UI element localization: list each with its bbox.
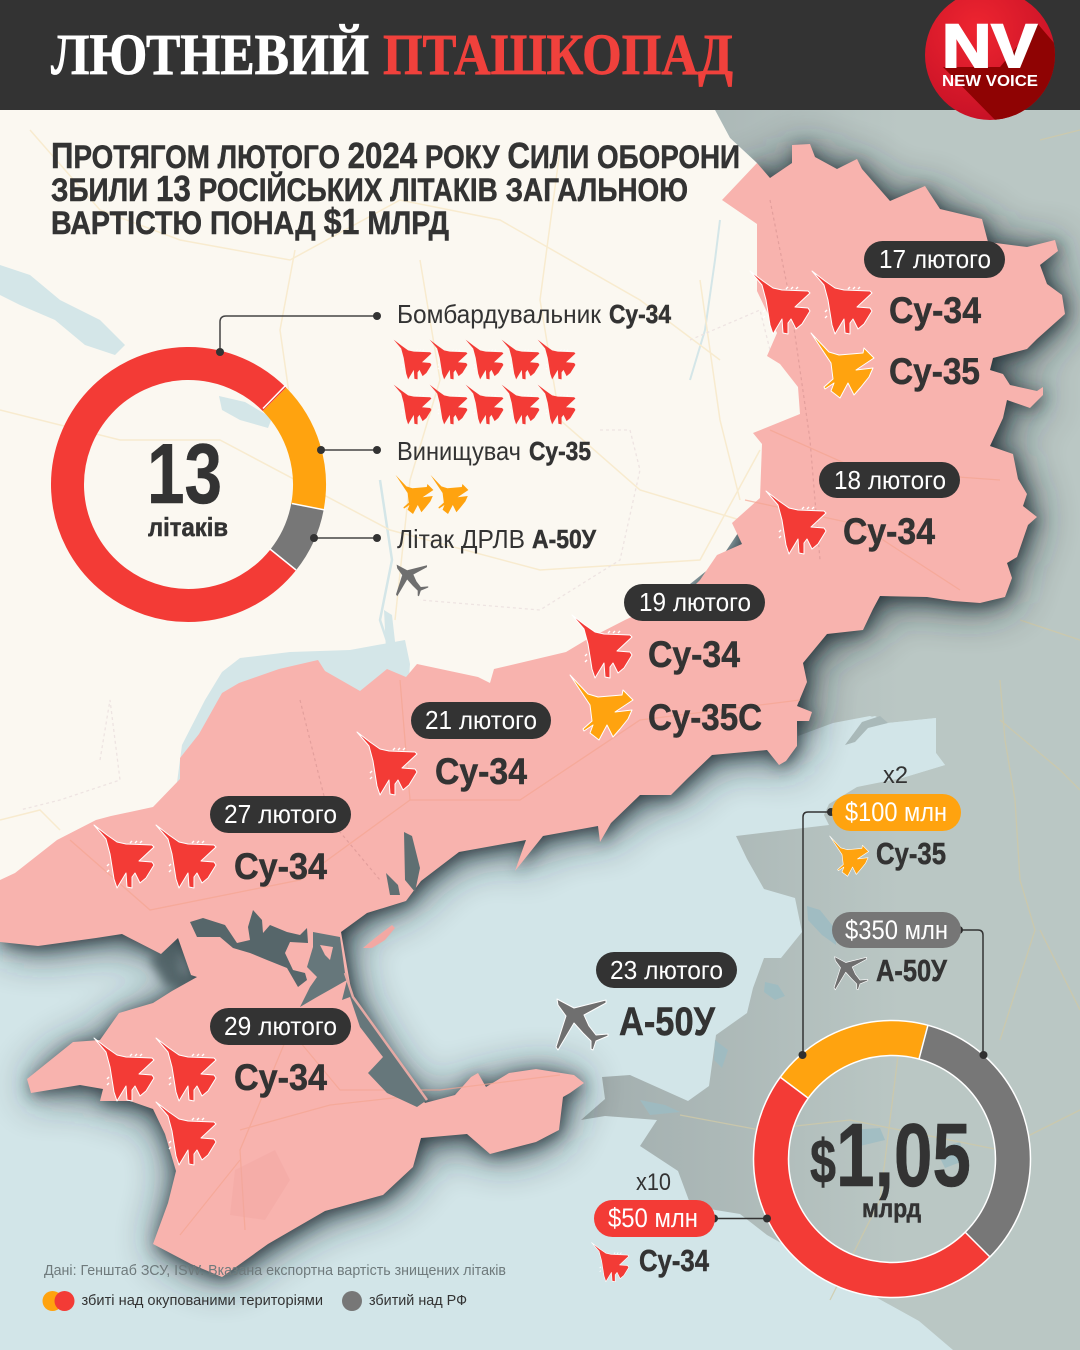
logo: NV New Voice: [925, 0, 1060, 125]
event: 21 February: Су-34: [435, 751, 527, 792]
subtitle: ПРОТЯГОМ ЛЮТОГО 2024 РОКУ СИЛИ ОБОРОНИ: [51, 135, 740, 176]
rivers and roads on Ukrainian land: [0, 130, 770, 830]
legend: Su-34 label: Бомбардувальник: [397, 299, 602, 329]
cost: Su-35: [830, 762, 961, 876]
event: 21 February: 21 лютого: [425, 705, 537, 735]
icons: ten Su-34: [394, 340, 575, 424]
event: 18 February: [766, 462, 960, 554]
event: 17 February: Су-34: [889, 290, 981, 331]
event: 27 February: Су-34: [234, 846, 327, 887]
water on Ukrainian land: [0, 265, 410, 790]
cost: Su-34: Су-34: [639, 1243, 710, 1278]
legend: A-50U label: [397, 524, 597, 554]
title: ЛЮТНЕВИЙ: [51, 22, 369, 87]
event: 27 February: 27 лютого: [224, 799, 337, 829]
donut chart: 13 aircraft by type: [67, 364, 325, 606]
icons: two Su-35: [396, 475, 468, 514]
event: 18 February: Су-34: [843, 511, 935, 552]
donut chart: total cost: 1,05: [836, 1106, 971, 1206]
legend: shot down over occupied territories: збиті над окупованими територіями: [82, 1292, 323, 1309]
cost: Su-34: [592, 1169, 715, 1282]
event: 29 February: 29 лютого: [224, 1011, 337, 1041]
event: 19 February: [570, 584, 765, 740]
legend connectors: [216, 312, 381, 542]
cost connectors: [710, 808, 988, 1222]
lakes and deltas: [640, 906, 966, 1168]
event: 19 February: Су-34: [648, 634, 740, 675]
cost: Su-34: $50 млн: [608, 1203, 698, 1233]
event: 19 February: 19 лютого: [639, 587, 751, 617]
legend: Su-35 label: Винищувач: [397, 436, 521, 466]
cost: A-50U: [832, 912, 961, 990]
cost: A-50U: А-50У: [876, 953, 948, 988]
roads in occupied territory: [70, 430, 1000, 1235]
event: 23 February: 23 лютого: [610, 955, 723, 985]
legend: shot down over Russia: [342, 1291, 467, 1311]
legend: Su-35 label: Су-35: [529, 436, 591, 466]
cost: Su-34: x10: [636, 1169, 671, 1196]
legend: shot down over Russia: збитий над РФ: [369, 1292, 467, 1309]
roads in Russia: [680, 130, 1080, 1300]
event: 27 February: [94, 796, 351, 888]
cost: Su-35: Су-35: [876, 836, 946, 871]
event: 17 February: [750, 241, 1005, 398]
legend: A-50U label: Літак ДРЛВ: [397, 524, 525, 554]
logo: NV New Voice: NEW VOICE: [942, 73, 1038, 90]
Karkinit gulf: [150, 938, 197, 992]
total: $1,05: $: [810, 1128, 836, 1197]
cost: A-50U: $350 млн: [845, 915, 948, 945]
event: 19 February: Су-35С: [648, 697, 762, 738]
event: 29 February: [94, 1008, 351, 1165]
header bar: [0, 0, 1080, 110]
event: 23 February: А-50У: [619, 1000, 716, 1044]
title: [51, 22, 733, 87]
event: 23 February: [556, 952, 737, 1050]
legend: A-50U label: А-50У: [532, 524, 597, 554]
Sivash lagoon: west part: [190, 910, 308, 987]
legend: Su-34 label: Су-34: [609, 299, 671, 329]
donut caption: літаків: [148, 512, 228, 542]
total unit: млрд: [862, 1193, 921, 1223]
donut chart: total cost: [754, 1020, 1030, 1298]
Sivash lagoon: east part: [300, 932, 427, 1107]
cost: Su-35: x2: [883, 762, 908, 789]
subtitle: [51, 135, 740, 242]
cost: Su-35: $100 млн: [845, 797, 947, 827]
event: 21 February: [357, 702, 551, 795]
icon: A-50U: [396, 565, 428, 596]
subtitle: ВАРТІСТЮ ПОНАД $1 МЛРД: [51, 201, 449, 242]
event: 17 February: 17 лютого: [879, 244, 991, 274]
event: 18 February: 18 лютого: [834, 465, 946, 495]
event: 29 February: Су-34: [234, 1057, 327, 1098]
title: ПТАШКОПАД: [383, 22, 733, 87]
source note: Дані: Генштаб ЗСУ, ISW. Вказана експортна вартість знищених літаків: [44, 1263, 506, 1279]
land: Russia: [581, 110, 1080, 1350]
subtitle: ЗБИЛИ 13 РОСІЙСЬКИХ ЛІТАКІВ ЗАГАЛЬНОЮ: [51, 168, 688, 209]
logo: NV New Voice: NV: [942, 12, 1037, 80]
event: 17 February: Су-35: [889, 351, 980, 392]
land: Ukraine: [0, 110, 800, 885]
donut total: 13: 13: [147, 427, 222, 522]
